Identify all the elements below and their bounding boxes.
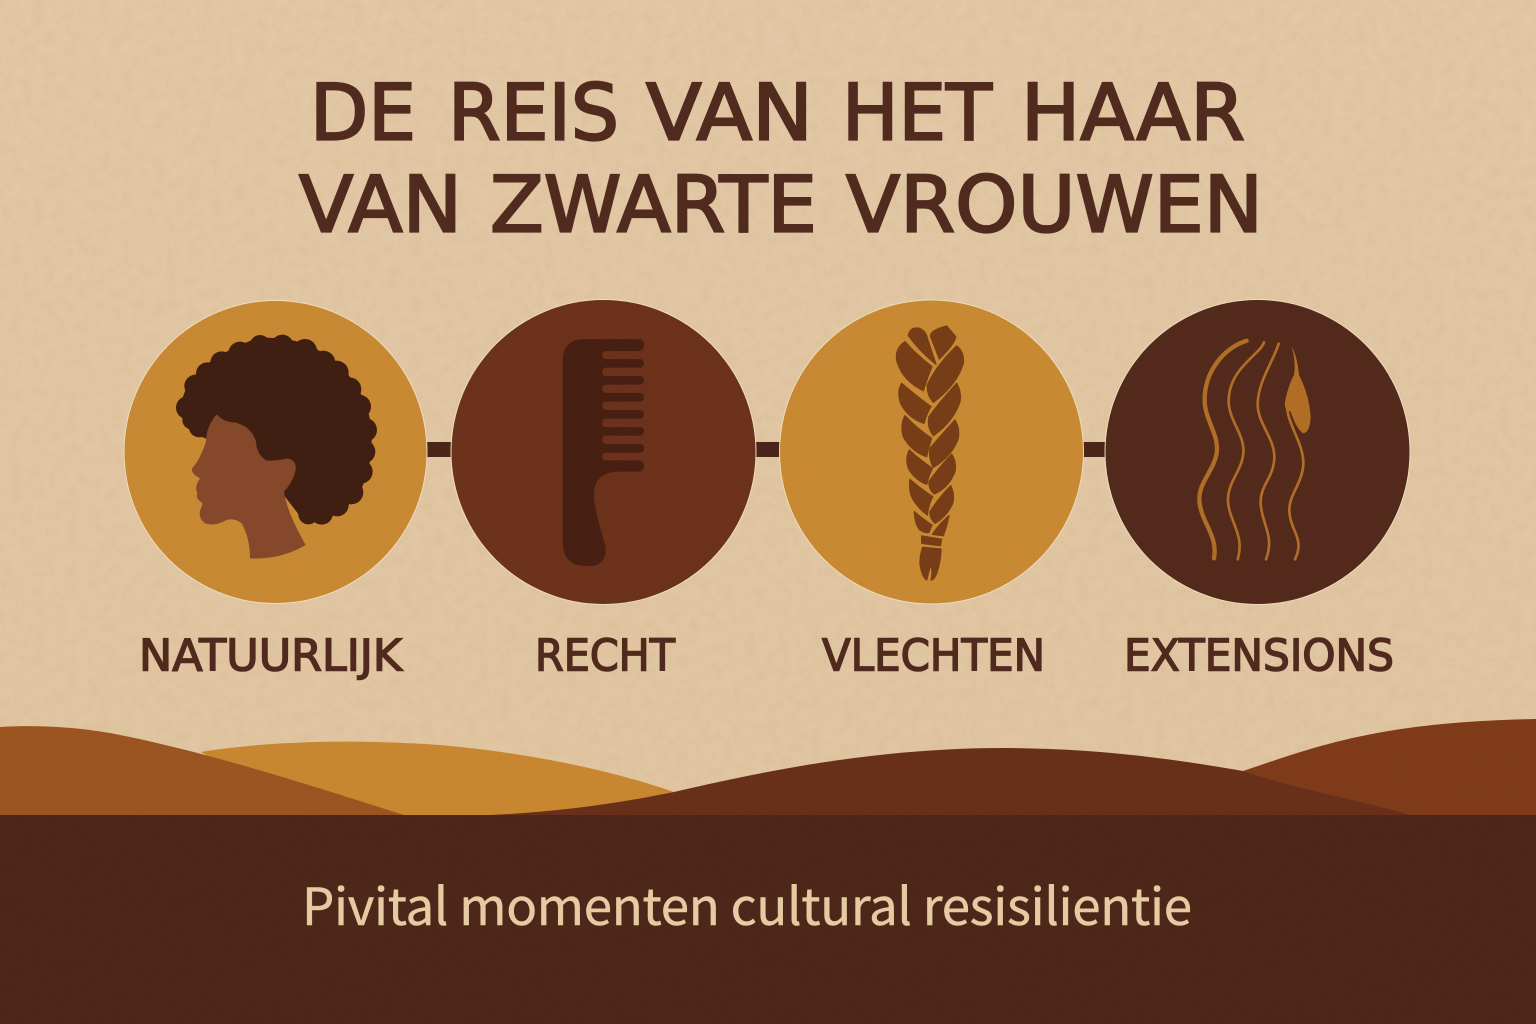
labels: EXTENSIONS: [1124, 630, 1394, 682]
title: ZWARTE: [490, 160, 817, 250]
title: VAN: [646, 68, 813, 158]
labels: NATUURLIJK: [139, 630, 403, 682]
icon: woman with afro profile: [176, 335, 377, 558]
icon: wavy hair strands with drop: [1199, 341, 1311, 559]
icon: comb: [563, 339, 644, 566]
tagline: Pivital momenten cultural resisilientie: [302, 866, 1192, 940]
panel: extensions: [1104, 299, 1410, 605]
title: VAN: [299, 160, 462, 250]
icon: braid: [896, 326, 963, 580]
labels: RECHT: [535, 630, 675, 682]
panel: natuurlijk: [124, 300, 428, 604]
panel: recht: [450, 299, 756, 605]
title: REIS: [448, 68, 619, 158]
title: [299, 68, 1263, 250]
title: HET: [842, 68, 993, 158]
bottom band: [0, 815, 1536, 1024]
title: HAAR: [1021, 68, 1245, 158]
title: VROUWEN: [846, 160, 1263, 250]
connectors between circles: [420, 442, 1115, 457]
labels: VLECHTEN: [822, 630, 1045, 682]
landscape hills: [0, 719, 1536, 816]
labels: [139, 630, 1394, 682]
panel: vlechten: [779, 300, 1084, 604]
title: DE: [310, 68, 416, 158]
